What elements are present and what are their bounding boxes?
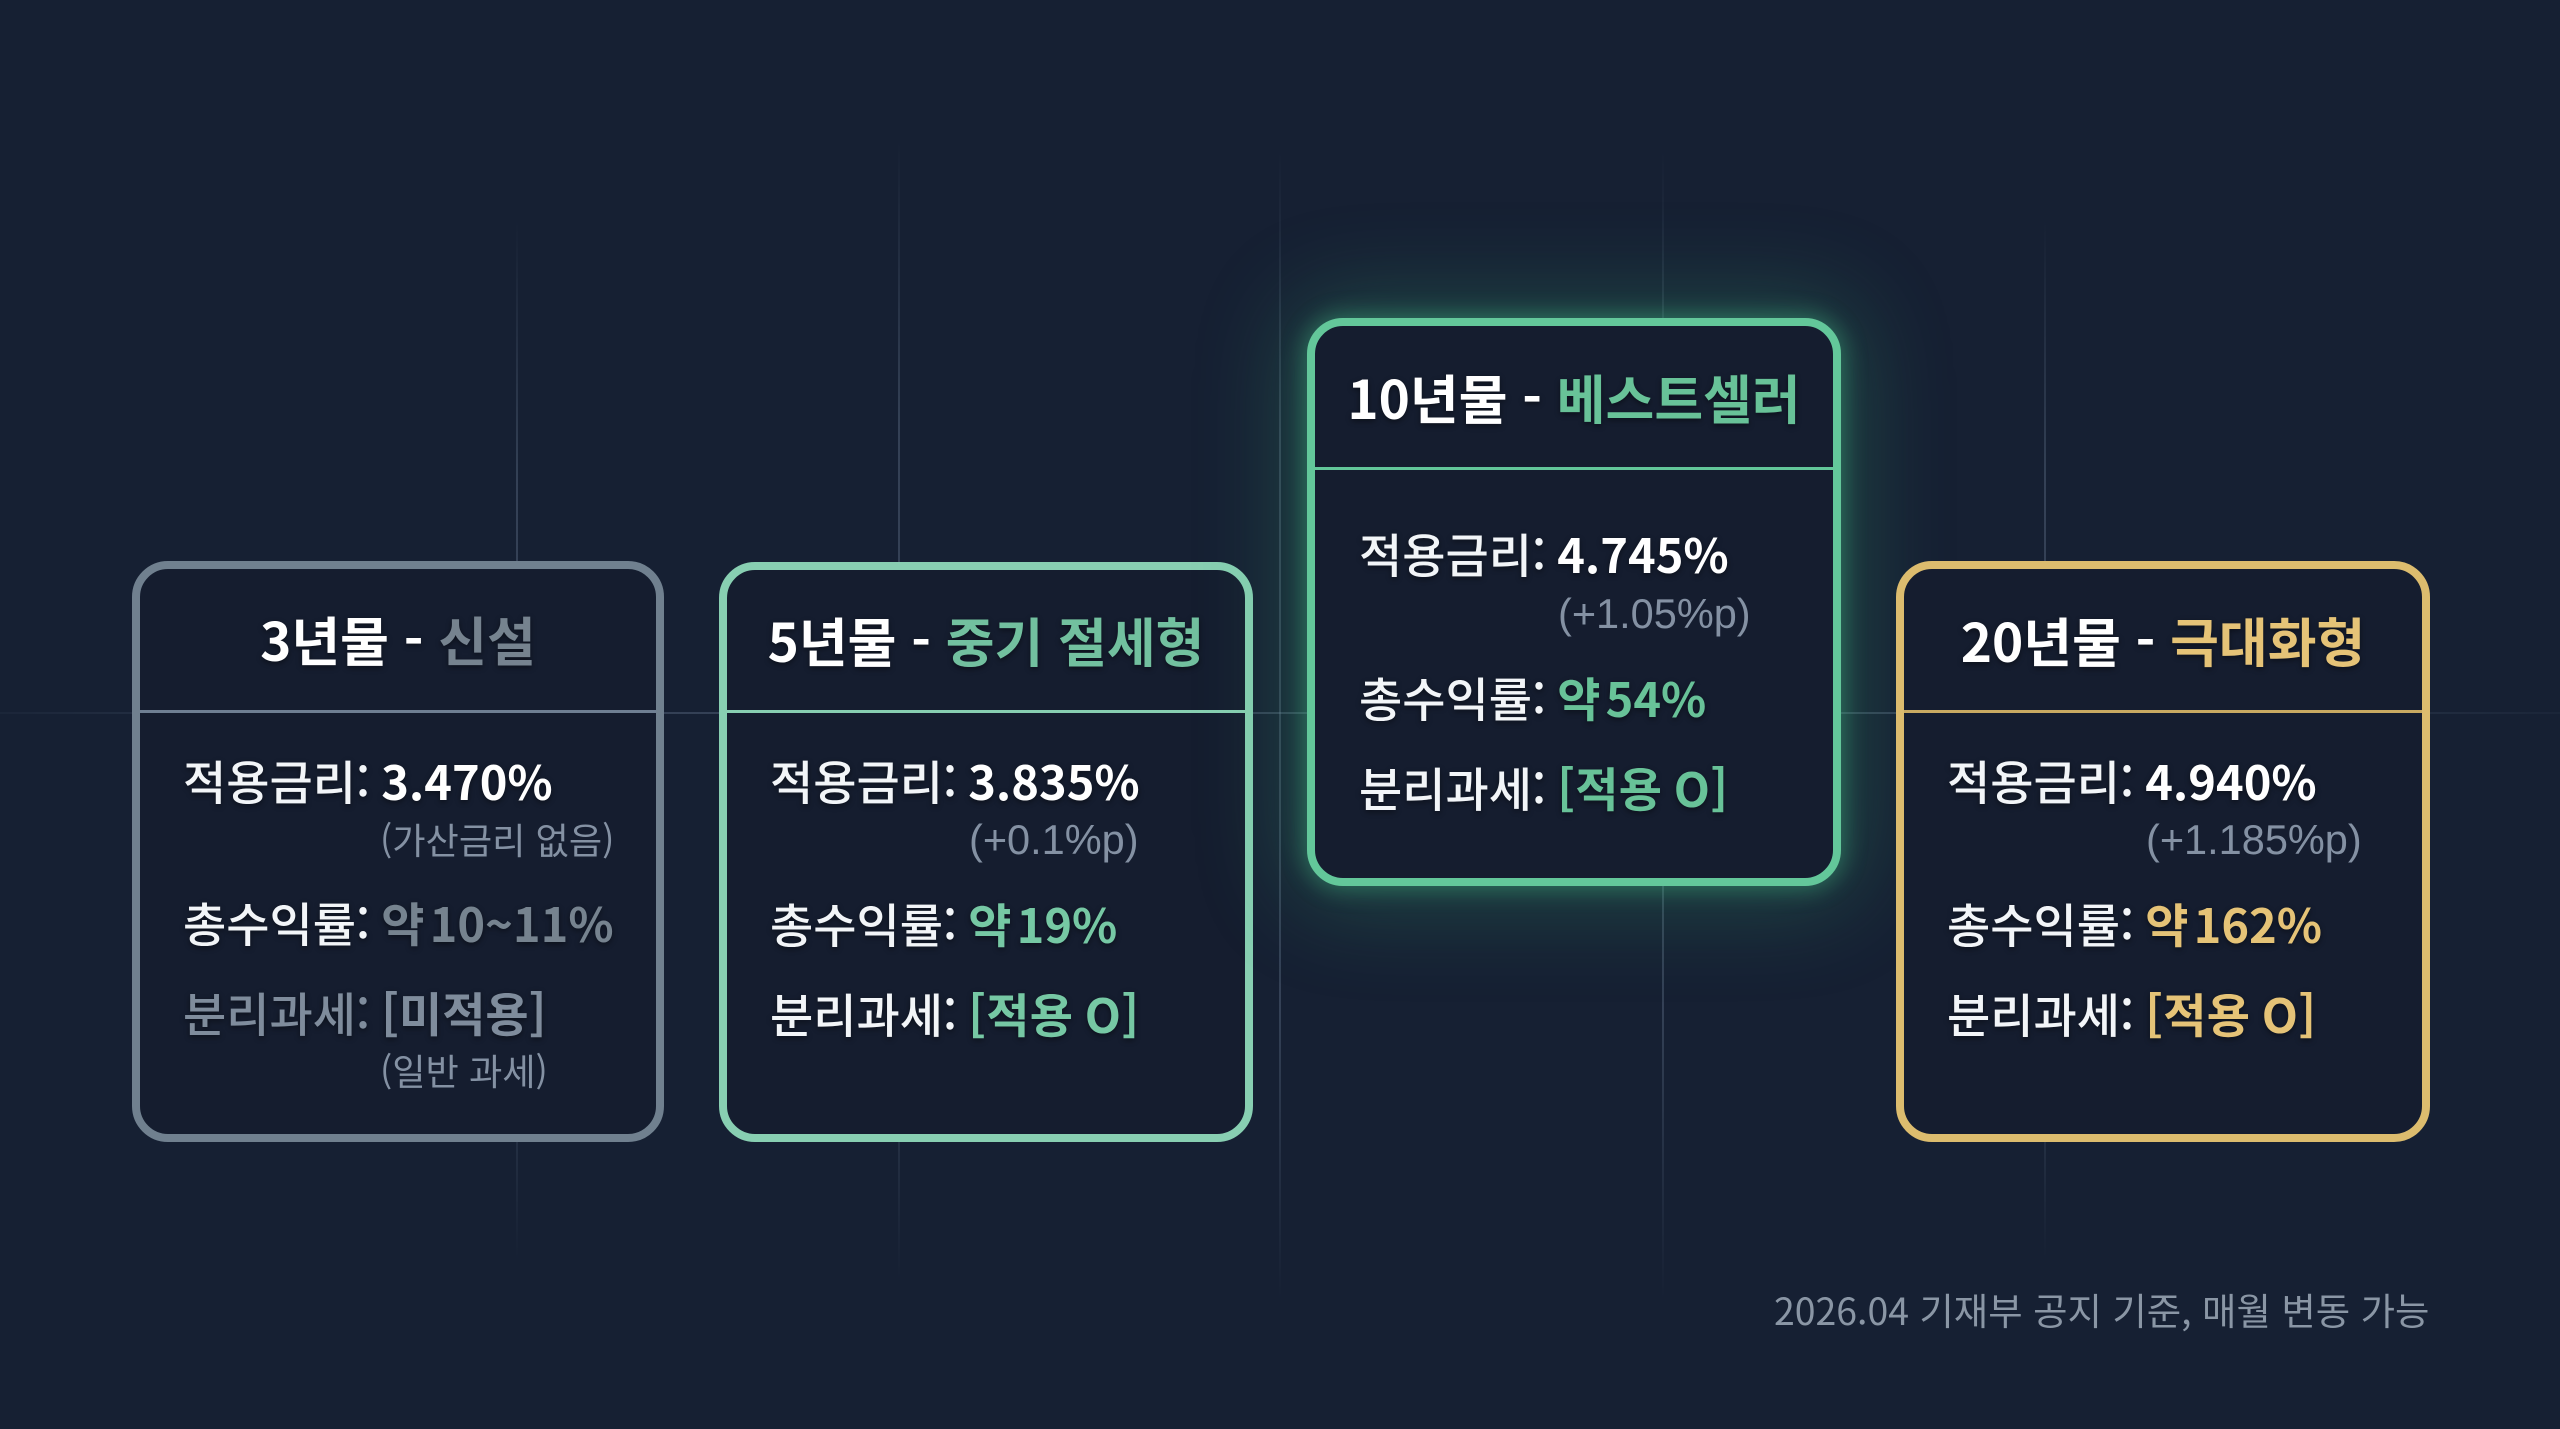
- applied rate: 20-year: 적용금리: 4.940%: [1947, 745, 2317, 814]
- separate tax: 3-year: 분리과세: [미적용]: [183, 977, 546, 1046]
- applied rate: 10-year: 적용금리: 4.745%: [1359, 518, 1729, 587]
- heading: 20-year: 20년물 - 극대화형: [1961, 602, 2365, 678]
- total return: 5-year: 총수익률: 약 19%: [770, 888, 1117, 957]
- separate tax: 20-year: 분리과세: [적용 O]: [1947, 978, 2316, 1047]
- heading: 3-year: 3년물 - 신설: [260, 601, 536, 677]
- panel: 10-year bond card: [1307, 318, 1841, 886]
- rate note: 5-year: (+0.1%p): [969, 816, 1139, 863]
- panel: 20-year bond card: [1896, 561, 2430, 1142]
- total return: 3-year: 총수익률: 약 10~11%: [183, 887, 614, 956]
- divider: 20-year header: [1904, 710, 2422, 713]
- total return: 10-year: 총수익률: 약 54%: [1359, 662, 1706, 731]
- heading: 5-year: 5년물 - 중기 절세형: [768, 602, 1204, 678]
- panel: 3-year bond card: [132, 561, 664, 1142]
- tax note: 3-year: (일반 과세): [380, 1044, 548, 1096]
- rate note: 3-year: (가산금리 없음): [380, 813, 614, 865]
- footnote: 2026.04 기재부 공지 기준, 매월 변동 가능: [1774, 1282, 2429, 1336]
- separate tax: 10-year: 분리과세: [적용 O]: [1359, 752, 1728, 821]
- separate tax: 5-year: 분리과세: [적용 O]: [770, 978, 1139, 1047]
- panel: 5-year bond card: [719, 562, 1253, 1142]
- rate note: 20-year: (+1.185%p): [2146, 816, 2362, 863]
- rate note: 10-year: (+1.05%p): [1558, 590, 1751, 637]
- heading: 10-year: 10년물 - 베스트셀러: [1347, 359, 1801, 435]
- applied rate: 5-year: 적용금리: 3.835%: [770, 745, 1140, 814]
- applied rate: 3-year: 적용금리: 3.470%: [183, 745, 553, 814]
- total return: 20-year: 총수익률: 약 162%: [1947, 888, 2322, 957]
- divider: 5-year header: [727, 710, 1245, 713]
- divider: 3-year header: [140, 710, 656, 713]
- divider: 10-year header: [1315, 467, 1833, 470]
